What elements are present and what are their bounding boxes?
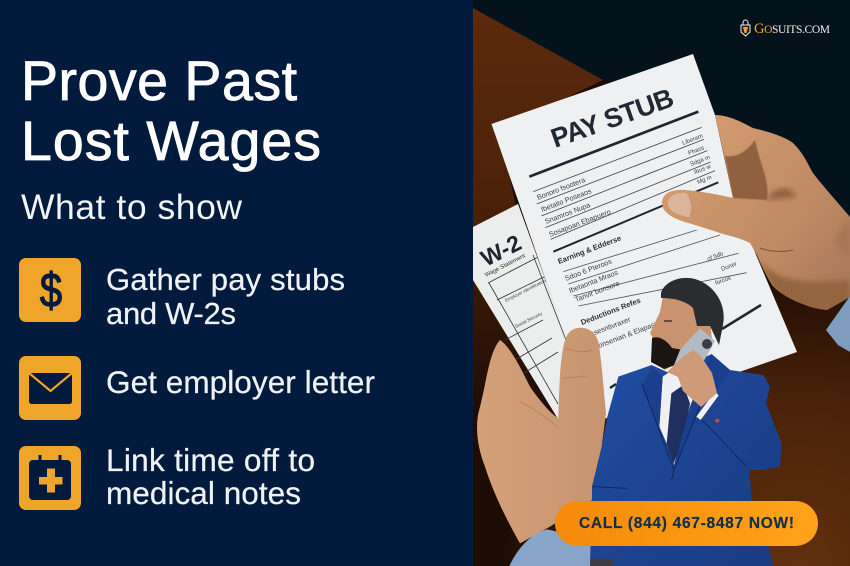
phone	[674, 328, 715, 366]
W-2 document: Wage Statement	[484, 253, 527, 279]
icon: dollar sign: $	[40, 264, 62, 317]
call to action button: CALL (844) 467-8487 NOW!	[579, 515, 794, 532]
attorney	[590, 278, 782, 566]
pay stub small text: Tanvir bonsore	[573, 279, 621, 304]
beard	[651, 337, 684, 369]
hand on phone	[667, 350, 717, 407]
pay stub small text: Ibus w	[694, 164, 713, 176]
pay stub small text: Phass	[688, 145, 705, 157]
face	[650, 293, 712, 370]
panel: left navy background	[0, 0, 473, 566]
icon: dollar sign	[19, 258, 81, 322]
watch	[590, 559, 613, 566]
pay stub small text: Doner	[721, 261, 738, 273]
left hand	[477, 328, 606, 566]
right hand holding document	[662, 115, 850, 320]
call to action button	[555, 501, 818, 546]
step 1 text: Gather pay stubs	[106, 262, 345, 297]
pay stub small text: Ibetaito Poseaos	[539, 186, 593, 214]
hair	[661, 278, 724, 345]
panel: photo of documents, hands and attorney	[473, 0, 850, 566]
checklist	[19, 258, 375, 511]
pay stub small text: forcos	[715, 275, 732, 287]
pay stub small text: Sdoo 6 Pteroos	[563, 257, 613, 283]
step 3 text: Link time off to	[106, 442, 315, 478]
pay stub small text: Iconsenian & Elapasp	[591, 319, 660, 352]
pay stub small text: Liberam	[682, 133, 704, 147]
W-2 document: Employer identification	[504, 278, 547, 303]
pay stub rules	[529, 112, 747, 306]
pay stub small text: Mg m	[697, 175, 713, 186]
right sleeve	[826, 296, 850, 352]
shirt cuff	[696, 392, 719, 420]
title: Lost Wages	[21, 110, 321, 172]
W-2 document	[473, 204, 566, 418]
suit seams	[593, 383, 747, 488]
Pay stub document	[492, 54, 797, 422]
photo background	[473, 0, 850, 566]
subtitle: What to show	[21, 187, 242, 227]
title	[21, 50, 321, 172]
left sleeve	[509, 529, 591, 566]
step 1 text: and W-2s	[106, 296, 236, 331]
eye	[664, 320, 672, 322]
pay stub small text: Ibetaonta Mraos	[567, 268, 620, 295]
shirt	[659, 372, 693, 465]
step 2 text: Get employer letter	[106, 364, 375, 400]
pay stub small text: of 5db	[707, 251, 725, 263]
lapels	[642, 367, 665, 443]
icon: lock shield	[741, 20, 750, 36]
icon: medical calendar	[19, 446, 81, 510]
pay stub small text: Sdga m	[690, 155, 711, 168]
pay stub small text: Deductions Refes	[579, 296, 642, 327]
icon: envelope	[19, 356, 81, 420]
suit	[590, 354, 782, 566]
pay stub small text: Bonoro fsootera	[535, 175, 586, 202]
W-2 document: W-2	[476, 229, 525, 271]
heading: PAY STUB: PAY STUB	[547, 83, 678, 154]
step 3 text: medical notes	[106, 475, 301, 511]
pay stub small text	[535, 133, 738, 352]
tie	[667, 385, 690, 464]
title: Prove Past	[21, 50, 298, 112]
wordmark: GOSUITS.COM	[754, 21, 830, 37]
pay stub small text: Sosapoan Ebapuero	[547, 207, 612, 239]
logo	[741, 20, 830, 37]
pay stub small text: Assesntivraxer	[584, 314, 632, 340]
W-2 document: Social Security	[514, 311, 544, 329]
pay stub small text: Snamros Nupa	[543, 200, 591, 226]
pay stub small text: Earning & Edderse	[556, 233, 622, 266]
